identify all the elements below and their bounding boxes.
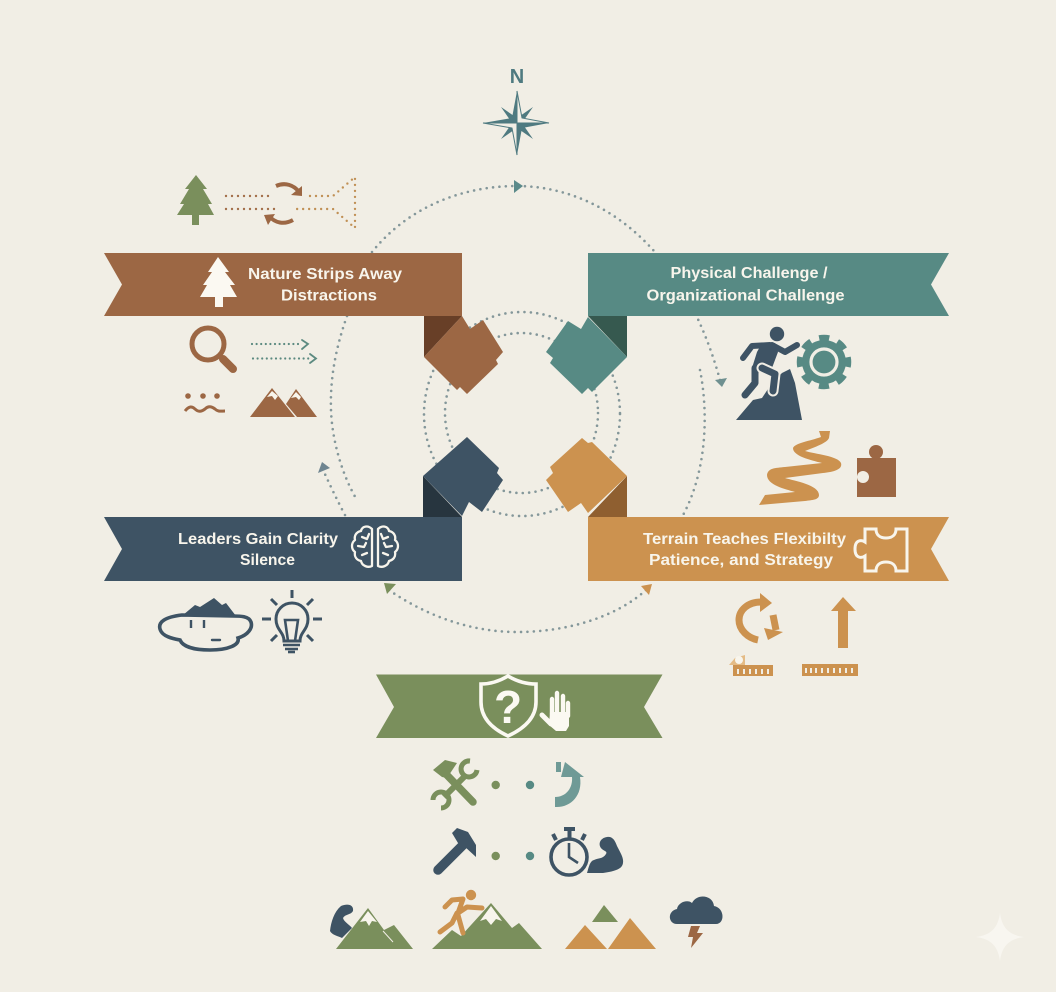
icon: flexed arm bbox=[587, 837, 623, 873]
ribbon bbox=[588, 517, 949, 581]
icon: brain bbox=[352, 527, 398, 567]
icon: light bulb bbox=[262, 590, 322, 652]
ribbon text: Distractions bbox=[281, 288, 377, 304]
icon: climber on green mountain bbox=[432, 890, 542, 949]
icon: shield with question mark bbox=[481, 676, 536, 736]
panel: nature strips away distractions bbox=[104, 253, 503, 394]
panel: terrain teaches flexibility bbox=[546, 438, 949, 581]
ribbon text bbox=[646, 265, 845, 304]
icon: teal curved arrow bbox=[555, 762, 584, 807]
compass rose bbox=[483, 66, 549, 155]
icon: dotted arrows bbox=[252, 340, 316, 363]
icon: stopwatch bbox=[551, 829, 587, 875]
icon: puzzle piece brown bbox=[857, 445, 896, 497]
ribbon bbox=[104, 253, 462, 316]
ribbon text: Organizational Challenge bbox=[646, 288, 845, 304]
icon: shield with question mark: ? bbox=[494, 681, 522, 733]
icon: magnifier bbox=[192, 328, 233, 369]
fold and diamond bbox=[546, 438, 627, 517]
ribbon text bbox=[643, 531, 846, 569]
icon: rulers bbox=[729, 655, 858, 676]
icon: cycle arrows bbox=[739, 593, 783, 640]
compass rose: N bbox=[510, 66, 524, 88]
panel: leaders gain clarity bbox=[104, 437, 503, 581]
icon: dotted funnel with swirl arrows bbox=[226, 177, 355, 228]
icon: gear bbox=[800, 338, 848, 386]
ribbon text: Silence bbox=[240, 552, 295, 569]
panel: green ribbon with shield and hand bbox=[376, 674, 662, 738]
icon: sparkle watermark bbox=[976, 913, 1024, 961]
icon: raised hand bbox=[542, 693, 569, 731]
icon: navy hammer bbox=[438, 828, 476, 870]
icon: orange and green triangles bbox=[565, 905, 656, 949]
ribbon bbox=[104, 517, 462, 581]
icon: arm beside green mountain bbox=[330, 905, 413, 949]
ribbon text bbox=[248, 266, 402, 304]
ribbon text: Patience, and Strategy bbox=[649, 552, 833, 569]
icon: climber on rock bbox=[736, 327, 802, 420]
connector dots row one bbox=[492, 781, 534, 789]
icon: hammer and wrench bbox=[433, 760, 477, 808]
panel: physical challenge bbox=[546, 253, 949, 394]
ribbon bbox=[588, 253, 949, 316]
icon: winding road bbox=[759, 431, 841, 505]
dotted cycle rings bbox=[324, 186, 720, 632]
icon: lake with mountain bbox=[160, 598, 251, 650]
icon: up arrow bbox=[831, 597, 856, 648]
fold and diamond bbox=[424, 316, 503, 394]
icon: puzzle outline bbox=[855, 529, 907, 571]
icon: dots and waves bbox=[185, 393, 225, 411]
icon: green tree bbox=[177, 175, 214, 225]
icon: storm cloud bbox=[670, 897, 723, 948]
ribbon text: Physical Challenge / bbox=[670, 265, 828, 282]
ribbon text bbox=[178, 531, 338, 569]
fold and diamond bbox=[546, 316, 627, 394]
icon: brown mountains bbox=[250, 388, 317, 417]
ribbon text: Nature Strips Away bbox=[248, 266, 402, 283]
ribbon text: Terrain Teaches Flexibilty bbox=[643, 531, 846, 548]
ribbon text: Leaders Gain Clarity bbox=[178, 531, 338, 548]
fold and diamond bbox=[423, 437, 503, 517]
icon: white tree bbox=[200, 257, 237, 307]
connector dots row two bbox=[492, 852, 534, 860]
arrowheads on the cycle bbox=[318, 180, 727, 595]
